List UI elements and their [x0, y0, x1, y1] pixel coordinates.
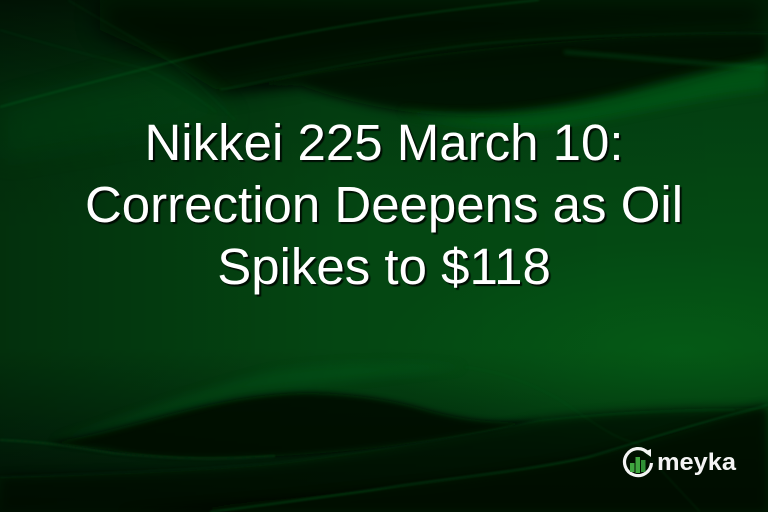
light lines — [0, 0, 539, 107]
title: Spikes to $118 — [217, 238, 551, 295]
title: Correction Deepens as Oil — [85, 176, 683, 233]
top dark swoosh — [100, 0, 768, 92]
bottom dark shapes — [0, 408, 768, 512]
icon: circular arrow with bars — [625, 449, 652, 476]
title — [85, 114, 683, 297]
wordmark: meyka — [657, 449, 737, 476]
logo: meyka — [622, 447, 737, 478]
title: Nikkei 225 March 10: — [144, 114, 624, 171]
